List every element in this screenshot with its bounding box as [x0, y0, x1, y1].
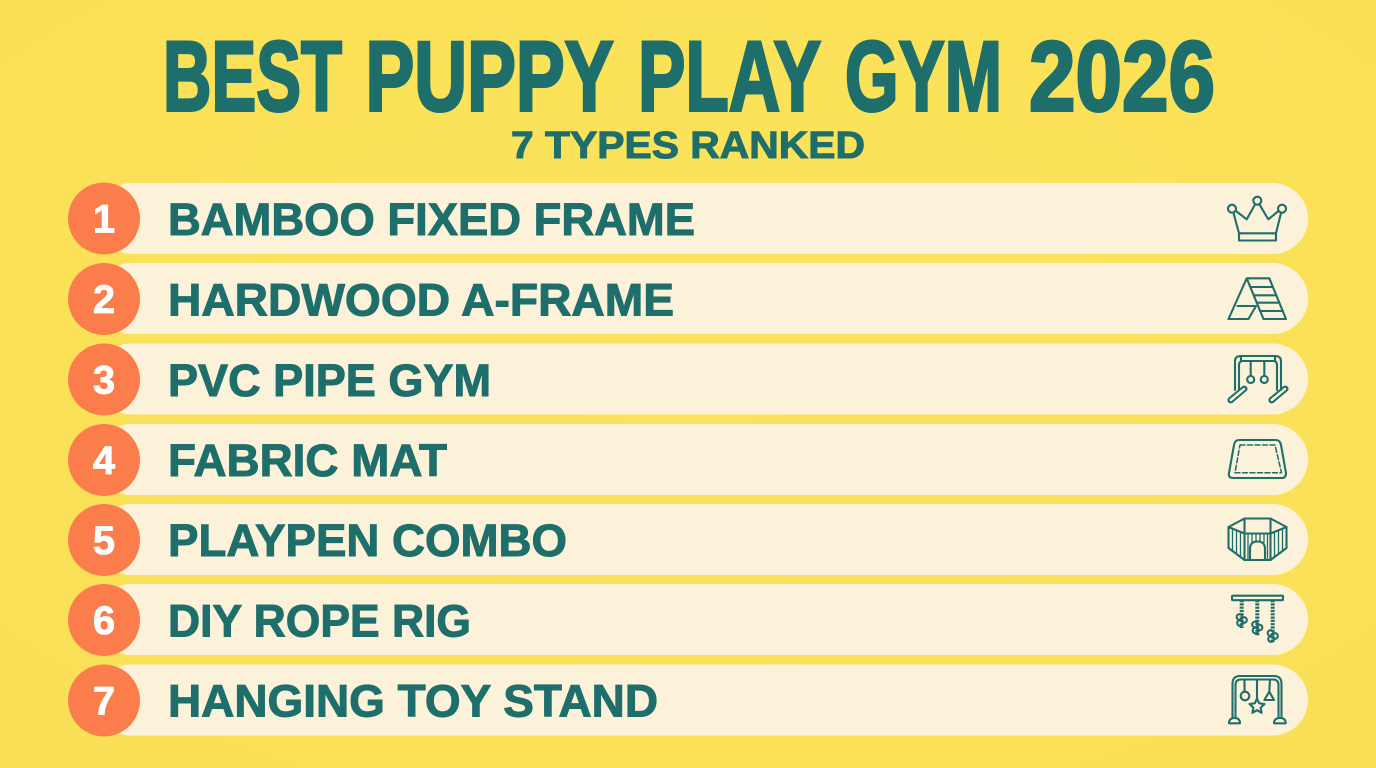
icon: crown — [1228, 197, 1286, 240]
title: GYM — [845, 20, 1002, 132]
title: BEST — [163, 20, 342, 132]
icon: rope rig — [1232, 596, 1283, 643]
row 3: pvc pipe gym — [68, 344, 1308, 416]
row 7: hanging toy stand — [68, 664, 1308, 736]
row 6: diy rope rig — [68, 584, 1308, 656]
icon: toy stand — [1229, 676, 1286, 723]
subtitle: 7 TYPES RANKED — [511, 125, 865, 167]
title: PUPPY — [366, 20, 614, 132]
title: PLAY — [638, 20, 821, 132]
rank number 7: 7 — [93, 680, 115, 724]
label: pvc pipe gym: PVC PIPE GYM — [168, 355, 491, 406]
rank number 5: 5 — [93, 519, 115, 563]
label: diy rope rig: DIY ROPE RIG — [168, 596, 471, 646]
icon: playpen — [1228, 518, 1286, 560]
rank number 2: 2 — [93, 278, 115, 322]
rank number 1: 1 — [93, 198, 115, 242]
row 2: hardwood a-frame — [68, 263, 1308, 335]
label: bamboo fixed frame: BAMBOO FIXED FRAME — [168, 194, 695, 245]
rank number 6: 6 — [93, 599, 115, 643]
label: hanging toy stand: HANGING TOY STAND — [168, 676, 658, 726]
rank number 4: 4 — [93, 439, 116, 483]
label: hardwood a-frame: HARDWOOD A-FRAME — [168, 274, 674, 326]
label: playpen combo: PLAYPEN COMBO — [168, 515, 567, 566]
row 4: fabric mat — [68, 424, 1308, 496]
row 5: playpen combo — [68, 504, 1308, 576]
title: 2026 — [1029, 20, 1215, 132]
icon: a-frame ramp — [1228, 278, 1286, 319]
label: fabric mat: FABRIC MAT — [168, 435, 447, 486]
title — [163, 20, 1215, 132]
rank number 3: 3 — [93, 358, 115, 402]
icon: fabric mat — [1229, 440, 1286, 478]
row 1: bamboo fixed frame — [68, 182, 1308, 254]
icon: pvc gym — [1228, 356, 1288, 402]
